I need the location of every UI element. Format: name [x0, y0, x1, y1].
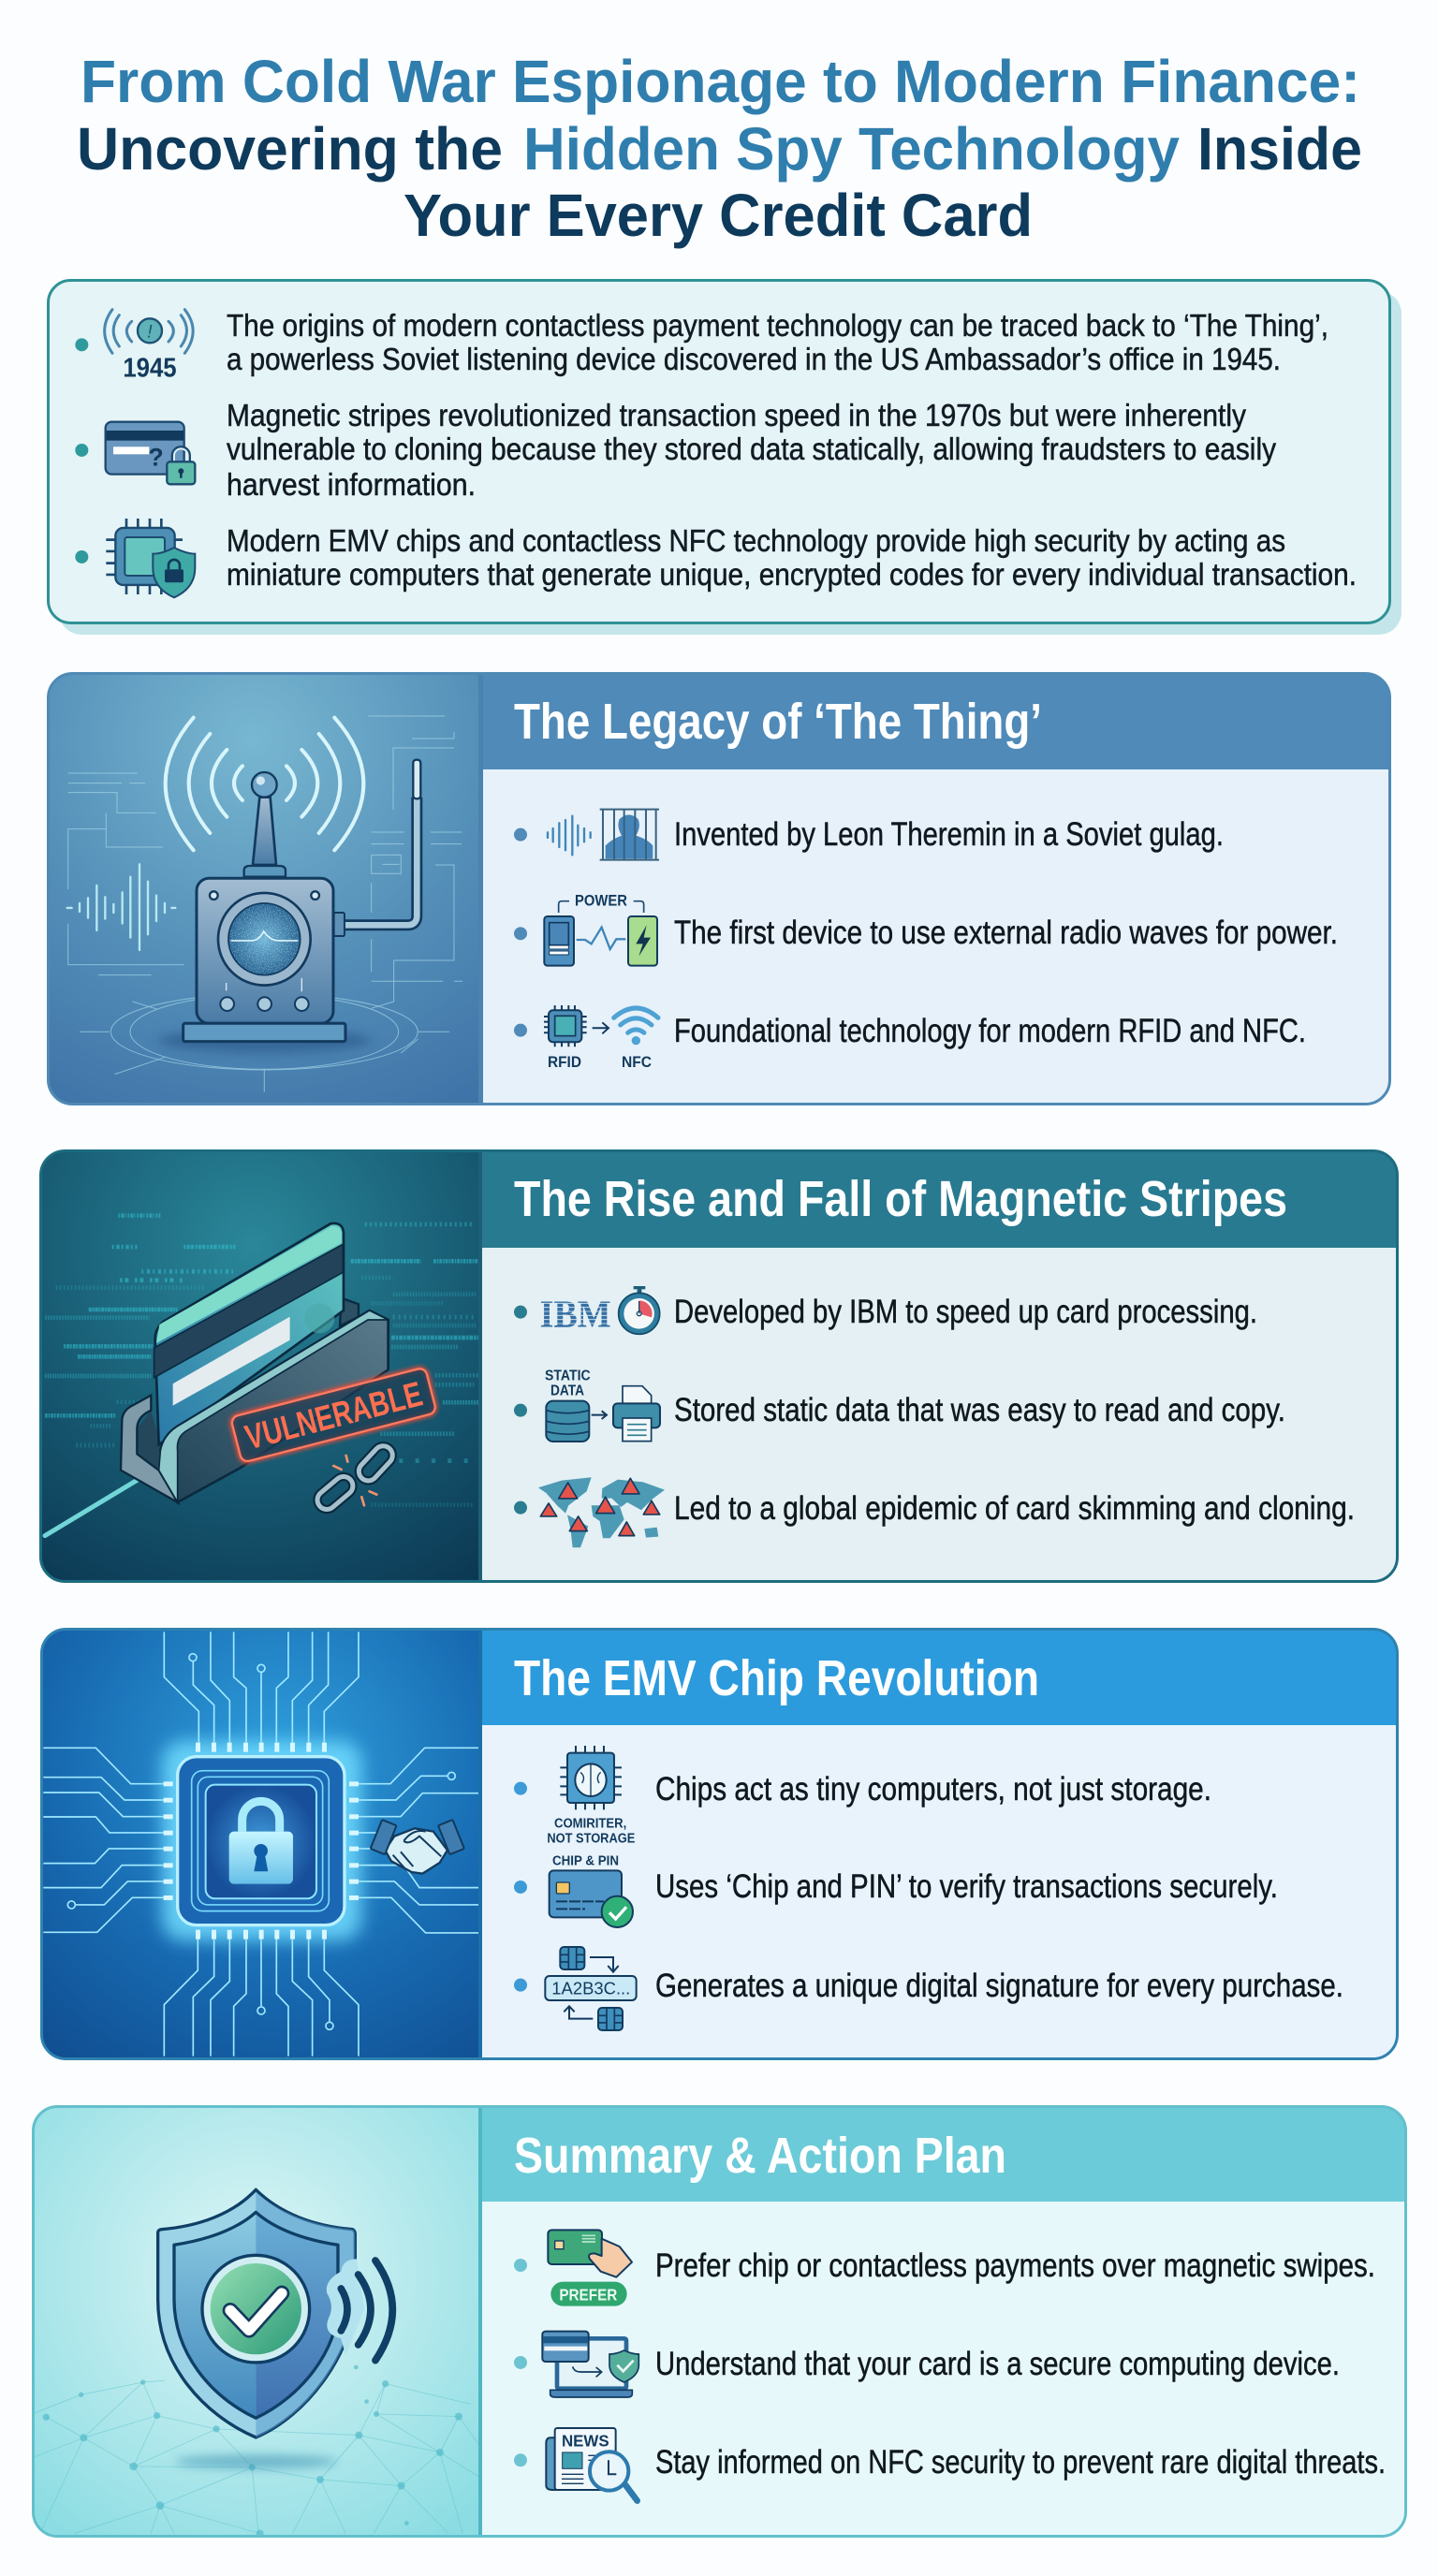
- title: Hidden Spy Technology: [523, 115, 1180, 183]
- heading: The Legacy of ‘The Thing’: [514, 694, 1042, 750]
- bullet: RFID and NFC: Foundational technology for modern RFID and NFC.: [674, 1013, 1306, 1049]
- heading: Summary & Action Plan: [514, 2128, 1006, 2184]
- icon: card with lock: [75, 422, 195, 484]
- illustration: card reader: [40, 1150, 481, 1582]
- header band: [480, 1150, 1398, 1248]
- heading: The Rise and Fall of Magnetic Stripes: [514, 1171, 1287, 1227]
- text: origins paragraph: a powerless Soviet listening device discovered in the US Ambassador’s office in 1945.: [227, 342, 1281, 376]
- divider: [478, 1629, 482, 2059]
- text: magnetic stripes paragraph: Magnetic stripes revolutionized transaction speed in the 1970s but were inherently: [227, 398, 1246, 432]
- bullet: RFID and NFC: [514, 1005, 1306, 1071]
- bullet: global skimming: [514, 1477, 1355, 1547]
- bullet: digital signature: [514, 1947, 1343, 2030]
- bullet: static data: STATIC: [545, 1368, 591, 1383]
- bullet: static data: Stored static data that was easy to read and copy.: [674, 1392, 1285, 1428]
- text: magnetic stripes paragraph: [227, 398, 1276, 502]
- icon: card with lock: ?: [148, 443, 164, 471]
- bullet: external radio power: [514, 891, 1338, 966]
- bullet: chip and PIN: [514, 1854, 1278, 1927]
- panel: Summary and Action Plan: [33, 2106, 1406, 2538]
- icon: radio signal 1945: !: [147, 323, 153, 343]
- illustration: secure chip: [41, 1629, 481, 2059]
- bullet: external radio power: The first device to use external radio waves for power.: [674, 915, 1338, 951]
- title: From Cold War Espionage to Modern Finance:: [81, 48, 1360, 115]
- text: magnetic stripes paragraph: harvest information.: [227, 467, 476, 502]
- title: Uncovering the: [77, 115, 503, 183]
- bullet: Theremin: [514, 810, 1224, 860]
- bullet: RFID and NFC: NFC: [622, 1053, 652, 1071]
- text: magnetic stripes paragraph: vulnerable to cloning because they stored data statically, allowing fraudsters to easily: [227, 432, 1276, 466]
- divider: [478, 1150, 482, 1582]
- header band: [480, 2106, 1406, 2202]
- bullet: secure computing device: [514, 2332, 1340, 2397]
- header band: [480, 1629, 1398, 1725]
- title: Your Every Credit Card: [404, 182, 1033, 249]
- title: [77, 48, 1362, 249]
- text: origins paragraph: [227, 308, 1328, 376]
- bullet: static data: DATA: [550, 1383, 584, 1399]
- bullet: static data: [514, 1368, 1285, 1442]
- text: EMV paragraph: [227, 523, 1357, 592]
- bullet: IBM: Developed by IBM to speed up card processing.: [674, 1294, 1257, 1330]
- bullet: Theremin: Invented by Leon Theremin in a Soviet gulag.: [674, 816, 1224, 853]
- bullet: chip and PIN: CHIP & PIN: [552, 1854, 619, 1869]
- bullet: news and NFC security: [514, 2428, 1386, 2501]
- heading: The EMV Chip Revolution: [514, 1650, 1039, 1706]
- bullet: news and NFC security: NEWS: [562, 2431, 609, 2450]
- illustration: protective shield: [33, 2106, 481, 2538]
- bullet: tiny computers: Chips act as tiny computers, not just storage.: [655, 1771, 1211, 1808]
- bullet: tiny computers: NOT STORAGE: [547, 1831, 636, 1846]
- bullet: prefer chip: [514, 2230, 1375, 2306]
- panel: The Legacy of The Thing: [48, 673, 1390, 1105]
- bullet: chip and PIN: Uses ‘Chip and PIN’ to verify transactions securely.: [655, 1868, 1278, 1905]
- badge: vulnerable: [230, 1368, 436, 1463]
- illustration: listening device: [48, 673, 481, 1105]
- bullet: IBM: IBM: [540, 1294, 611, 1337]
- badge: vulnerable: VULNERABLE: [242, 1373, 426, 1456]
- bullet: tiny computers: [514, 1746, 1211, 1846]
- icon: chip with shield: [75, 519, 195, 597]
- icon: handshake: [371, 1820, 464, 1874]
- bullet: RFID and NFC: RFID: [548, 1053, 581, 1071]
- divider: [478, 2106, 482, 2537]
- bullet: prefer chip: PREFER: [559, 2285, 618, 2304]
- icon: radio signal 1945: [75, 310, 193, 384]
- panel: The EMV Chip Revolution: [41, 1629, 1398, 2059]
- header band: [481, 673, 1390, 769]
- panel: The Rise and Fall of Magnetic Stripes: [40, 1150, 1398, 1582]
- icon: radio signal 1945: 1945: [123, 354, 177, 384]
- bullet: external radio power: POWER: [575, 891, 627, 909]
- title: Inside: [1197, 115, 1362, 183]
- bullet: tiny computers: COMIRITER,: [554, 1817, 626, 1832]
- text: origins paragraph: The origins of modern contactless payment technology can be traced back to ‘The Thing’,: [227, 308, 1328, 343]
- bullet: IBM: [514, 1286, 1257, 1337]
- panel: introduction summary: [49, 281, 1401, 635]
- text: EMV paragraph: Modern EMV chips and contactless NFC technology provide high security by acting as: [227, 523, 1285, 558]
- bullet: digital signature: 1A2B3C...: [551, 1979, 630, 1998]
- divider: [478, 673, 483, 1105]
